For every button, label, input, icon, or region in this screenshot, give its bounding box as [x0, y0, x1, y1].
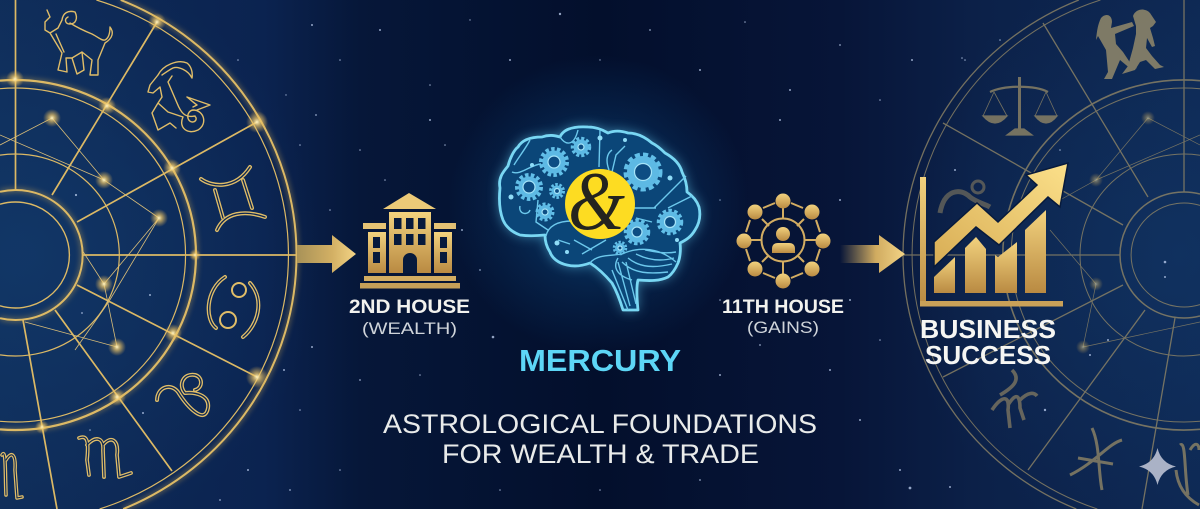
- label: 2nd house: 2ND HOUSE: [349, 297, 470, 318]
- label: business success: BUSINESS: [920, 314, 1056, 344]
- icon: capricorn goat: [148, 62, 210, 132]
- heading: mercury: MERCURY: [519, 343, 681, 378]
- icon: leo glyph: [157, 375, 208, 415]
- zodiac glyphs, left wheel: [2, 10, 265, 498]
- title: astrological foundations: [383, 409, 817, 469]
- left zodiac wheel: [0, 0, 296, 509]
- constellation, right wheel: [1050, 118, 1200, 347]
- icon: scorpio glyph: [79, 437, 131, 477]
- icon: leo behind chart: [940, 181, 990, 213]
- icon: network of people: [736, 194, 830, 288]
- icon: cancer glyph: [209, 277, 258, 337]
- icon: ram: [45, 10, 112, 75]
- star nodes, right wheel: [1076, 111, 1155, 354]
- icon: virgo glyph: [2, 454, 22, 498]
- gears: [517, 138, 682, 254]
- icon: corner sparkle: [1139, 448, 1176, 485]
- icon: bank building: [360, 193, 460, 288]
- right zodiac wheel (faded): [903, 0, 1200, 509]
- title: astrological foundations: ASTROLOGICAL FOUNDATIONS: [383, 409, 817, 439]
- icon: gemini glyph: [201, 167, 265, 230]
- icon: pisces glyph: [1070, 428, 1122, 490]
- label: business success: [920, 314, 1056, 370]
- icon: virgo, right wheel: [1176, 444, 1199, 505]
- label: business success: SUCCESS: [925, 340, 1051, 370]
- label: 2nd house: [349, 297, 470, 338]
- label: 11th house: [722, 297, 844, 337]
- icon: scorpio, right wheel: [992, 370, 1037, 428]
- chart: rising bars with arrow: [920, 163, 1068, 306]
- logo: yellow ampersand badge: &: [568, 155, 626, 248]
- title: astrological foundations: FOR WEALTH & TRADE: [442, 439, 759, 469]
- brain inner folds: [512, 130, 692, 310]
- arrow: 11th house to business success: [840, 235, 905, 273]
- wheel glow: [0, 0, 296, 509]
- arrow: wheel to 2nd house: [297, 235, 356, 273]
- brain glow: [448, 55, 748, 355]
- icon: libra scales: [983, 77, 1057, 135]
- icon: circuit brain: [499, 127, 700, 310]
- circuit nodes: [508, 136, 679, 254]
- label: 11th house: (GAINS): [747, 318, 819, 337]
- icon: gemini twins: [1096, 10, 1164, 79]
- label: 2nd house: (WEALTH): [362, 319, 457, 338]
- constellation lines: [0, 118, 159, 350]
- label: 11th house: 11TH HOUSE: [722, 297, 844, 318]
- star nodes and sparkles: [6, 13, 268, 434]
